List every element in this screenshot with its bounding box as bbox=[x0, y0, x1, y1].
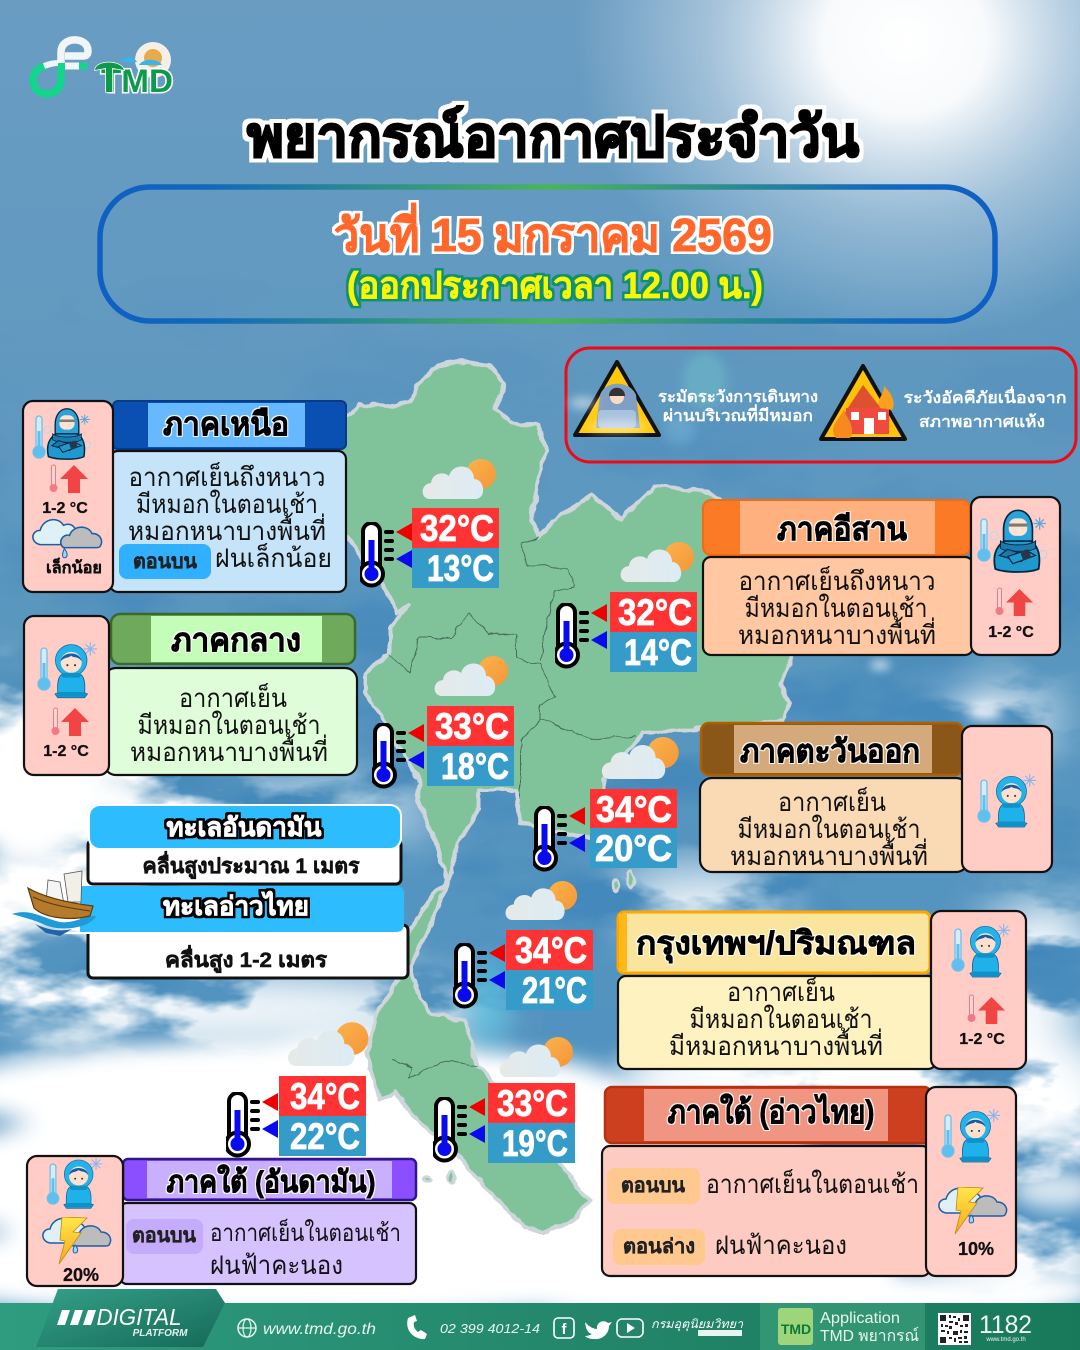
heading: east bbox=[701, 723, 963, 775]
panel: south andaman bbox=[27, 1156, 416, 1286]
northeast forecast marker: 14°C bbox=[624, 632, 692, 673]
north text: อากาศเย็นถึงหนาว bbox=[128, 461, 326, 492]
heading: north: ภาคเหนือ bbox=[163, 406, 289, 442]
heading: south gulf: ภาคใต้ (อ่าวไทย) bbox=[668, 1093, 874, 1130]
east text bbox=[700, 778, 968, 872]
central forecast marker: 18°C bbox=[441, 746, 509, 787]
northeast text: มีหมอกในตอนเช้า bbox=[744, 593, 928, 623]
north text: มีหมอกในตอนเช้า bbox=[136, 489, 318, 519]
northeast forecast marker bbox=[555, 542, 697, 673]
south gulf text: ตอนล่าง bbox=[623, 1236, 695, 1258]
issue time: (ออกประกาศเวลา 12.00 น.) bbox=[347, 265, 763, 306]
east forecast marker: 34°C bbox=[596, 789, 672, 830]
south andaman text: อากาศเย็นในตอนเช้า bbox=[210, 1218, 401, 1247]
heading: south gulf bbox=[605, 1087, 931, 1143]
panel: east bbox=[700, 723, 1052, 872]
north icons: เล็กน้อย bbox=[46, 556, 102, 577]
central icons: 1-2 °C bbox=[43, 743, 89, 760]
andaman forecast marker: 34°C bbox=[290, 1076, 360, 1117]
panel: andaman sea: คลื่นสูงประมาณ 1 เมตร bbox=[142, 850, 360, 880]
website bbox=[238, 1319, 376, 1338]
panel: andaman sea bbox=[88, 805, 401, 884]
bangkok text: มีหมอกในตอนเช้า bbox=[690, 1004, 872, 1034]
south gulf forecast marker: 33°C bbox=[497, 1083, 568, 1124]
north text: ฝนเล็กน้อย bbox=[215, 542, 332, 573]
panel: andaman sea: ทะเลอันดามัน bbox=[166, 812, 322, 842]
panel: northeast bbox=[703, 497, 1060, 655]
northeast icons: 1-2 °C bbox=[988, 624, 1034, 641]
central text: หมอกหนาบางพื้นที่ bbox=[130, 733, 328, 767]
hotline 1182: 1182 bbox=[979, 1311, 1032, 1339]
panel: central bbox=[24, 614, 357, 775]
central text bbox=[104, 668, 357, 775]
east text: มีหมอกในตอนเช้า bbox=[738, 814, 920, 844]
panel: south gulf bbox=[602, 1087, 1016, 1276]
central forecast marker: 33°C bbox=[435, 706, 509, 747]
south gulf icons: 10% bbox=[958, 1239, 994, 1259]
digital platform tab: PLATFORM bbox=[133, 1328, 188, 1339]
south andaman text: ฝนฟ้าคะนอง bbox=[210, 1250, 343, 1280]
south andaman icons bbox=[27, 1156, 123, 1286]
application bbox=[778, 1308, 919, 1345]
warning text: fog: ผ่านบริเวณที่มีหมอก bbox=[663, 404, 813, 425]
digital platform tab bbox=[36, 1289, 225, 1347]
south andaman icons: 20% bbox=[63, 1265, 99, 1285]
north text: หมอกหนาบางพื้นที่ bbox=[128, 512, 326, 546]
warning text: fog: ระมัดระวังการเดินทาง bbox=[658, 388, 818, 406]
north forecast marker: 13°C bbox=[427, 548, 494, 589]
phone: 02 399 4012-14 bbox=[440, 1321, 540, 1336]
warning text: fog bbox=[658, 388, 818, 425]
east forecast marker bbox=[533, 737, 679, 870]
north icons bbox=[23, 401, 113, 592]
upper south forecast marker: 21°C bbox=[522, 970, 587, 1011]
social icons: กรมอุตุนิยมวิทยา bbox=[651, 1317, 744, 1332]
andaman forecast marker bbox=[226, 1022, 368, 1157]
application: Application bbox=[820, 1310, 900, 1327]
south gulf text: ตอนบน bbox=[621, 1175, 685, 1197]
northeast text: อากาศเย็นถึงหนาว bbox=[738, 565, 936, 596]
heading: bangkok bbox=[618, 912, 930, 973]
digital platform tab: DIGITAL bbox=[96, 1304, 182, 1330]
icon: fog driving warning bbox=[569, 362, 659, 435]
social icons: f bbox=[562, 1321, 568, 1338]
heading: northeast bbox=[703, 500, 970, 555]
panel: north bbox=[23, 401, 346, 592]
icon: fire warning bbox=[821, 366, 905, 439]
icon: ship bbox=[12, 871, 96, 936]
northeast forecast marker: 32°C bbox=[618, 592, 692, 633]
andaman forecast marker: 22°C bbox=[290, 1116, 360, 1157]
warning text: fire: สภาพอากาศแห้ง bbox=[919, 413, 1045, 431]
bangkok icons bbox=[931, 911, 1026, 1069]
upper south forecast marker: 34°C bbox=[515, 930, 587, 971]
map of Thailand bbox=[340, 362, 793, 1233]
bangkok text: อากาศเย็น bbox=[727, 976, 835, 1007]
footer bar bbox=[0, 1289, 1080, 1350]
warning text: fire: ระวังอัคคีภัยเนื่องจาก bbox=[904, 386, 1066, 407]
east icons bbox=[962, 726, 1052, 872]
central icons bbox=[24, 616, 109, 775]
east forecast marker: 20°C bbox=[595, 828, 672, 869]
logo: DE and TMD bbox=[33, 40, 173, 99]
south andaman text bbox=[120, 1203, 416, 1284]
warning text: fire bbox=[904, 386, 1066, 431]
north icons: 1-2 °C bbox=[42, 500, 88, 517]
heading: east: ภาคตะวันออก bbox=[740, 733, 920, 769]
northeast text bbox=[703, 557, 973, 655]
bangkok text bbox=[618, 976, 936, 1069]
logo: DE and TMD: TMD bbox=[101, 63, 173, 99]
north forecast marker bbox=[360, 459, 499, 589]
north forecast marker: 32°C bbox=[420, 508, 494, 549]
panel: gulf of thailand sea: คลื่นสูง 1-2 เมตร bbox=[165, 944, 328, 974]
title: พยากรณ์อากาศประจำวัน bbox=[247, 105, 859, 168]
social icons bbox=[554, 1317, 744, 1339]
northeast icons bbox=[971, 497, 1060, 655]
heading: north bbox=[113, 401, 346, 449]
north text: ตอนบน bbox=[133, 551, 197, 573]
east text: อากาศเย็น bbox=[778, 786, 886, 817]
upper south forecast marker bbox=[453, 881, 593, 1011]
date text: วันที่ 15 มกราคม 2569 bbox=[334, 203, 772, 261]
application: TMD พยากรณ์ bbox=[820, 1326, 919, 1345]
south gulf text: อากาศเย็นในตอนเช้า bbox=[706, 1168, 919, 1199]
heading: central bbox=[111, 614, 355, 664]
website: www.tmd.go.th bbox=[263, 1321, 376, 1338]
heading: south andaman bbox=[123, 1159, 416, 1200]
south gulf text bbox=[602, 1146, 930, 1276]
heading: central: ภาคกลาง bbox=[171, 622, 301, 658]
central forecast marker bbox=[372, 656, 514, 787]
south gulf forecast marker bbox=[433, 1037, 575, 1164]
south gulf forecast marker: 19°C bbox=[502, 1123, 568, 1164]
south gulf text: ฝนฟ้าคะนอง bbox=[715, 1230, 847, 1260]
panel: gulf of thailand sea: ทะเลอ่าวไทย bbox=[163, 890, 309, 921]
bangkok icons: 1-2 °C bbox=[959, 1031, 1005, 1048]
south andaman text: ตอนบน bbox=[132, 1225, 196, 1247]
warning panel bbox=[566, 348, 1076, 462]
QR code bbox=[938, 1313, 971, 1345]
hotline 1182: www.tmd.go.th bbox=[985, 1337, 1026, 1343]
heading: south andaman: ภาคใต้ (อันดามัน) bbox=[166, 1164, 376, 1199]
application: TMD bbox=[781, 1321, 811, 1337]
date box bbox=[100, 187, 995, 321]
bangkok text: มีหมอกหนาบางพื้นที่ bbox=[669, 1027, 883, 1061]
east text: หมอกหนาบางพื้นที่ bbox=[730, 837, 928, 871]
central text: มีหมอกในตอนเช้า bbox=[138, 710, 320, 740]
south gulf icons bbox=[926, 1087, 1016, 1276]
panel: bangkok bbox=[618, 911, 1026, 1069]
central text: อากาศเย็น bbox=[179, 682, 287, 713]
heading: northeast: ภาคอีสาน bbox=[777, 511, 907, 547]
northeast text: หมอกหนาบางพื้นที่ bbox=[738, 616, 936, 650]
heading: bangkok: กรุงเทพฯ/ปริมณฑล bbox=[636, 925, 916, 964]
phone bbox=[407, 1315, 540, 1339]
north text bbox=[110, 451, 346, 592]
panel: gulf of thailand sea bbox=[45, 886, 408, 978]
